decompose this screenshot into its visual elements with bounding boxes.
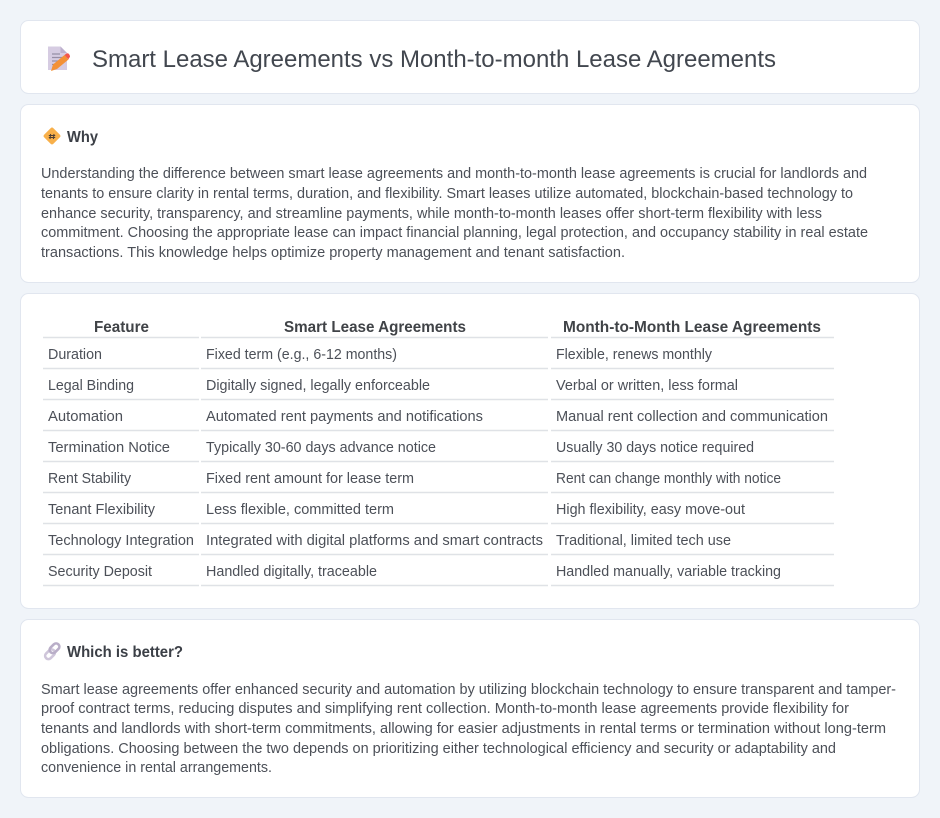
row: duration: Duration	[48, 347, 102, 363]
row: tenant flexibility: Tenant Flexibility	[48, 502, 156, 518]
row: rent stability: Rent Stability	[48, 471, 132, 487]
panel: title card	[20, 20, 920, 94]
panel: which is better	[20, 620, 920, 798]
table header: Month-to-Month Lease Agreements	[563, 319, 821, 336]
heading: which is better: Which is better?	[67, 644, 183, 661]
panel: comparison table	[20, 294, 920, 608]
text block: why paragraph	[41, 166, 868, 261]
row: rent stability	[48, 471, 781, 487]
row: termination notice: Termination Notice	[48, 440, 170, 456]
row: rent stability: Rent can change monthly with notice	[556, 471, 781, 487]
row: termination notice	[48, 440, 754, 456]
row: tenant flexibility: High flexibility, easy move-out	[556, 502, 745, 518]
panel: why	[20, 104, 920, 282]
row: technology integration: Traditional, limited tech use	[556, 533, 731, 549]
table header: Feature	[94, 319, 149, 336]
table header: Smart Lease Agreements	[284, 319, 466, 336]
row: technology integration: Technology Integration	[48, 533, 194, 549]
row: automation: Automation	[48, 409, 123, 425]
text block: which is better paragraph: proof contract terms, reducing disputes and simplifying rent collection. Month-to-month lease agreements provide flexibility for	[41, 701, 849, 717]
row: legal binding	[48, 378, 738, 394]
text block: which is better paragraph: obligations. Choosing between the two depends on prioritizing either technological efficiency and security or adaptability and	[41, 741, 836, 757]
row: duration	[48, 347, 713, 363]
text block: which is better paragraph	[41, 682, 896, 776]
text block: why paragraph: transactions. This knowledge helps optimize property management and tenant satisfaction.	[41, 245, 625, 261]
text block: why paragraph: tenants to ensure clarity in rental terms, duration, and flexibility. Smart leases utilize automated, blockchain-based technology to	[41, 186, 853, 202]
text block: which is better paragraph: convenience in rental arrangements.	[41, 760, 272, 776]
row: legal binding: Legal Binding	[48, 378, 134, 394]
row: tenant flexibility	[48, 502, 745, 518]
row: automation	[48, 409, 828, 425]
text block: which is better paragraph: Smart lease agreements offer enhanced security and automation by utilizing blockchain technology to ensure transparent and tamper-	[41, 682, 896, 698]
row: termination notice: Typically 30-60 days advance notice	[206, 440, 436, 456]
text block: why paragraph: commitment. Choosing the appropriate lease can impact financial planning, legal protection, and occupancy stability in real estate	[41, 225, 868, 241]
text block: why paragraph: enhance security, transparency, and streamline payments, while month-to-month leases offer short-term flexibility with less	[41, 206, 822, 222]
row: security deposit: Handled digitally, traceable	[206, 564, 377, 580]
icon: document with pencil	[48, 46, 70, 71]
row: rent stability: Fixed rent amount for lease term	[206, 471, 414, 487]
row: tenant flexibility: Less flexible, committed term	[206, 502, 394, 518]
row: technology integration: Integrated with digital platforms and smart contracts	[206, 533, 543, 549]
table header	[94, 319, 821, 336]
text block: why paragraph: Understanding the difference between smart lease agreements and month-to-month lease agreements is crucial for landlords and	[41, 166, 867, 182]
icon: link	[44, 642, 61, 660]
row: automation: Automated rent payments and notifications	[206, 409, 483, 425]
row: duration: Fixed term (e.g., 6-12 months)	[206, 347, 397, 363]
row: legal binding: Verbal or written, less formal	[556, 378, 738, 394]
row: security deposit: Handled manually, variable tracking	[556, 564, 781, 580]
row: technology integration	[48, 533, 731, 549]
row: duration: Flexible, renews monthly	[556, 347, 713, 363]
row: legal binding: Digitally signed, legally enforceable	[206, 378, 430, 394]
row: termination notice: Usually 30 days notice required	[556, 440, 754, 456]
heading: why: Why	[67, 129, 98, 146]
icon: diamond sign	[43, 127, 61, 145]
row: automation: Manual rent collection and communication	[556, 409, 828, 425]
title: Smart Lease Agreements vs Month-to-month Lease Agreements	[92, 46, 776, 73]
text block: which is better paragraph: tenants and landlords with short-term commitments, allowing for easier adjustments in rental terms or termination without long-term	[41, 721, 886, 737]
row: security deposit: Security Deposit	[48, 564, 152, 580]
row: security deposit	[48, 564, 781, 580]
